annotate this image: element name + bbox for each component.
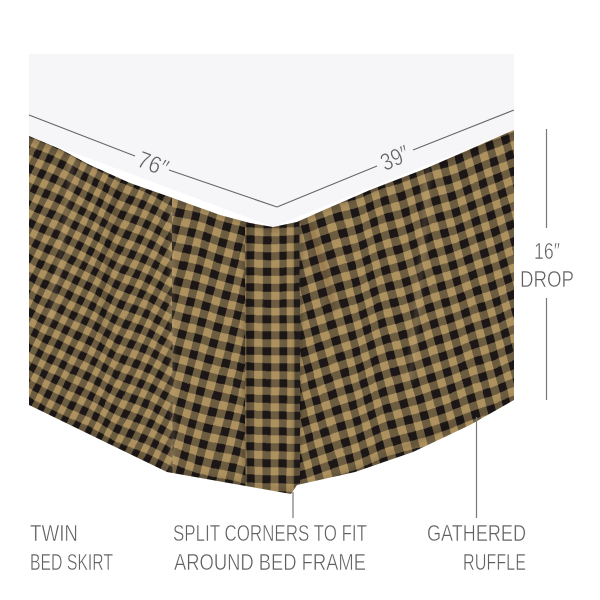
middle gathered section <box>172 198 246 486</box>
right side panel <box>300 130 514 484</box>
dimension line: 39 inch width: 39″ <box>376 140 414 177</box>
label: twin bed skirt <box>30 520 113 575</box>
dimension: 16 inch drop: DROP <box>520 266 574 292</box>
bed mattress panel <box>29 54 514 227</box>
dimension line: 76 inch width <box>29 115 277 207</box>
fabric folds <box>30 132 514 491</box>
callout: split corners: SPLIT CORNERS TO FIT <box>173 520 367 546</box>
callout: gathered ruffle: RUFFLE <box>463 549 526 575</box>
left side panel <box>29 136 172 473</box>
dimension: 16 inch drop <box>520 129 574 400</box>
label: twin bed skirt: BED SKIRT <box>30 549 113 575</box>
label: twin bed skirt: TWIN <box>30 520 78 546</box>
corner section <box>245 220 300 494</box>
callout: split corners: AROUND BED FRAME <box>174 549 366 575</box>
callout: gathered ruffle <box>427 417 526 575</box>
bed skirt fabric <box>29 130 514 494</box>
callout: split corners <box>173 492 367 575</box>
dimension line: 76 inch width: 76″ <box>134 146 173 183</box>
infographic: twin bed skirt <box>28 54 573 570</box>
dimension: 16 inch drop: 16″ <box>534 238 560 264</box>
dimension line: 39 inch width <box>277 110 514 207</box>
callout: gathered ruffle: GATHERED <box>427 520 526 546</box>
